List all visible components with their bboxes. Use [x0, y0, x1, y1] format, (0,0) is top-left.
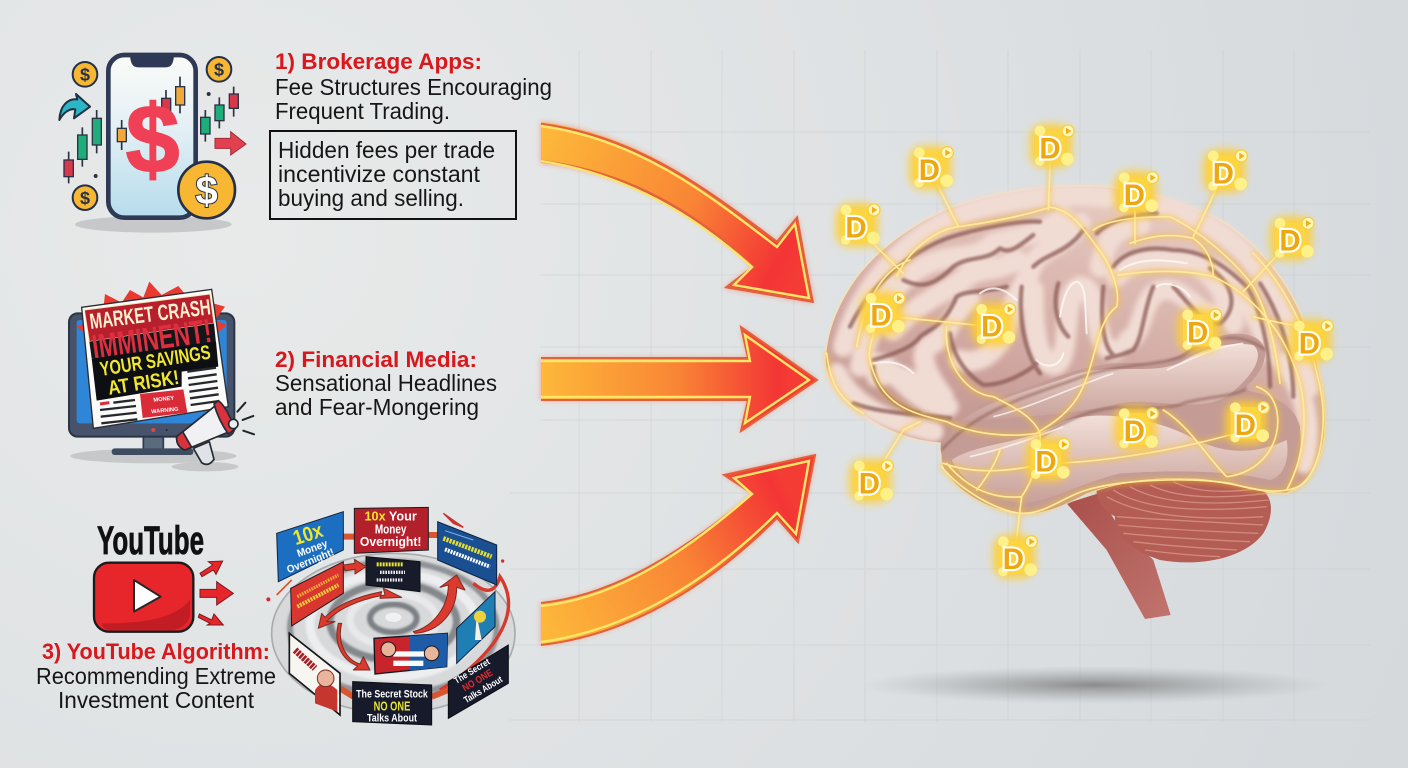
- icon: brokerage phone with candlesticks and coins: [59, 55, 246, 233]
- panel: secret stock right: Talks About: [462, 674, 504, 705]
- ground shadow under brain: [860, 666, 1330, 704]
- panel: blue thumbnail right: [438, 522, 497, 585]
- panel: 10x your money overnight red: Overnight!: [360, 535, 421, 549]
- badge: dopamine 8: [1178, 308, 1222, 352]
- callout: hidden fees: incentivize constant: [278, 161, 481, 187]
- text: youtube algorithm subtitle: Investment Content: [58, 687, 255, 713]
- heading: financial media: 2) Financial Media:: [275, 347, 477, 372]
- icon: monitor with sensational newspaper and megaphone: [69, 282, 254, 471]
- highlights on folds: [873, 260, 1190, 373]
- panel: secret stock centre: Talks About: [367, 712, 417, 724]
- arrows: swirling red arrows: [318, 559, 465, 670]
- badge: dopamine 7: D: [1299, 327, 1320, 360]
- panel: secret stock right: NO ONE: [461, 668, 495, 694]
- text: financial media subtitle: and Fear-Mongering: [275, 394, 479, 420]
- brain illustration: [825, 124, 1333, 619]
- badge: dopamine 4: [1114, 171, 1158, 214]
- badge: dopamine 4: D: [1124, 179, 1145, 212]
- panel: 10x your money overnight red: Money: [375, 522, 406, 536]
- badge: dopamine 2: [909, 146, 953, 189]
- panel: 10x money overnight blue: 10x: [290, 519, 326, 550]
- badge: dopamine 9: [972, 303, 1016, 346]
- callout: hidden fees: buying and selling.: [278, 185, 464, 211]
- badge: dopamine 2: D: [919, 154, 940, 187]
- icon: monitor with sensational newspaper and megaphone: WARNING: [151, 407, 179, 415]
- panel: teal thumbnail right: [457, 592, 495, 663]
- badge: dopamine 6: D: [1279, 225, 1301, 258]
- panel: dark thumbnail centre: [366, 557, 420, 592]
- badge: dopamine 5: [1203, 149, 1247, 193]
- callout: hidden fees: Hidden fees per trade: [278, 137, 495, 163]
- badge: dopamine 10: [861, 292, 905, 335]
- cerebellum: [1096, 478, 1271, 562]
- badge: dopamine 12: D: [1235, 409, 1256, 442]
- panel: 10x your money overnight red: [354, 507, 428, 553]
- badge: dopamine 14: [849, 459, 893, 503]
- panel: 10x money overnight blue: Overnight!: [285, 546, 336, 576]
- icon: monitor with sensational newspaper and megaphone: MARKET CRASH: [88, 294, 212, 334]
- badge: dopamine 15: [993, 535, 1037, 578]
- panel: red thumbnail left: [291, 562, 343, 626]
- badge: dopamine 6: [1270, 217, 1314, 260]
- icon: monitor with sensational newspaper and megaphone: AT RISK!: [106, 367, 181, 400]
- badge: dopamine 10: D: [870, 300, 892, 333]
- badge: dopamine 12: [1225, 401, 1269, 444]
- badge: dopamine 13: [1026, 438, 1070, 481]
- badge: dopamine 14: D: [859, 467, 880, 500]
- panel: secret stock centre: The Secret Stock: [356, 688, 428, 700]
- badge: dopamine 7: [1289, 319, 1333, 363]
- heading: youtube algorithm: 3) YouTube Algorithm:: [42, 639, 270, 664]
- arrow: youtube to brain: [541, 455, 815, 645]
- panel: secret stock right: The Secret: [452, 657, 492, 686]
- panel: scene centre: [374, 633, 447, 674]
- icon: youtube logo: [94, 519, 233, 632]
- icon: recommendation vortex of thumbnails: [266, 507, 515, 725]
- icon: brokerage phone with candlesticks and coins: $: [80, 188, 90, 208]
- heading: brokerage apps: 1) Brokerage Apps:: [275, 49, 482, 74]
- icon: brokerage phone with candlesticks and coins: $: [214, 60, 224, 80]
- text: youtube algorithm subtitle: [36, 663, 276, 713]
- icon: brokerage phone with candlesticks and coins: $: [80, 65, 90, 85]
- panel: 10x money overnight blue: Money: [295, 538, 329, 560]
- arrow: financial media to brain: [541, 327, 817, 431]
- panel: secret stock centre: [353, 682, 432, 725]
- badge: dopamine 11: D: [1124, 415, 1145, 448]
- panel: 10x your money overnight red: 10x Your: [365, 510, 417, 524]
- badge: dopamine 3: [1030, 124, 1074, 168]
- text: youtube algorithm subtitle: Recommending Extreme: [36, 663, 276, 689]
- dopamine pathways: [827, 148, 1323, 559]
- icon: monitor with sensational newspaper and megaphone: IMMINENT!: [90, 313, 214, 366]
- temporal lobe: [942, 334, 1301, 513]
- badge: dopamine 15: D: [1003, 543, 1024, 576]
- badge: dopamine 9: D: [981, 311, 1002, 344]
- brainstem: [1067, 493, 1171, 619]
- text: brokerage subtitle: [275, 74, 552, 124]
- cerebrum: [825, 186, 1325, 513]
- panel: secret stock centre: NO ONE: [374, 699, 410, 714]
- badge: dopamine 3: D: [1039, 132, 1061, 165]
- badge: dopamine 11: [1114, 407, 1158, 450]
- icon: brokerage phone with candlesticks and coins: $: [126, 86, 180, 194]
- icon: brokerage phone with candlesticks and coins: $: [196, 169, 218, 213]
- badge: dopamine 1: D: [845, 211, 867, 244]
- callout: hidden fees: [270, 131, 516, 219]
- text: financial media subtitle: [275, 370, 497, 420]
- icon: monitor with sensational newspaper and megaphone: MONEY: [153, 396, 175, 404]
- text: brokerage subtitle: Frequent Trading.: [275, 98, 450, 124]
- icon: youtube logo: YouTube: [97, 519, 204, 563]
- panel: secret stock right: [448, 645, 508, 718]
- icon: monitor with sensational newspaper and megaphone: YOUR SAVINGS: [98, 342, 212, 381]
- badge: dopamine 1: [836, 203, 880, 247]
- panel: shocked man thumbnail: [289, 633, 340, 715]
- text: brokerage subtitle: Fee Structures Encouraging: [275, 74, 552, 100]
- badge: dopamine 8: D: [1187, 316, 1208, 349]
- arrow: brokerage to brain: [541, 122, 814, 303]
- text: financial media subtitle: Sensational Headlines: [275, 370, 497, 396]
- badge: dopamine 13: D: [1035, 446, 1057, 479]
- badge: dopamine 5: D: [1213, 157, 1234, 190]
- panel: 10x money overnight blue: [277, 512, 343, 582]
